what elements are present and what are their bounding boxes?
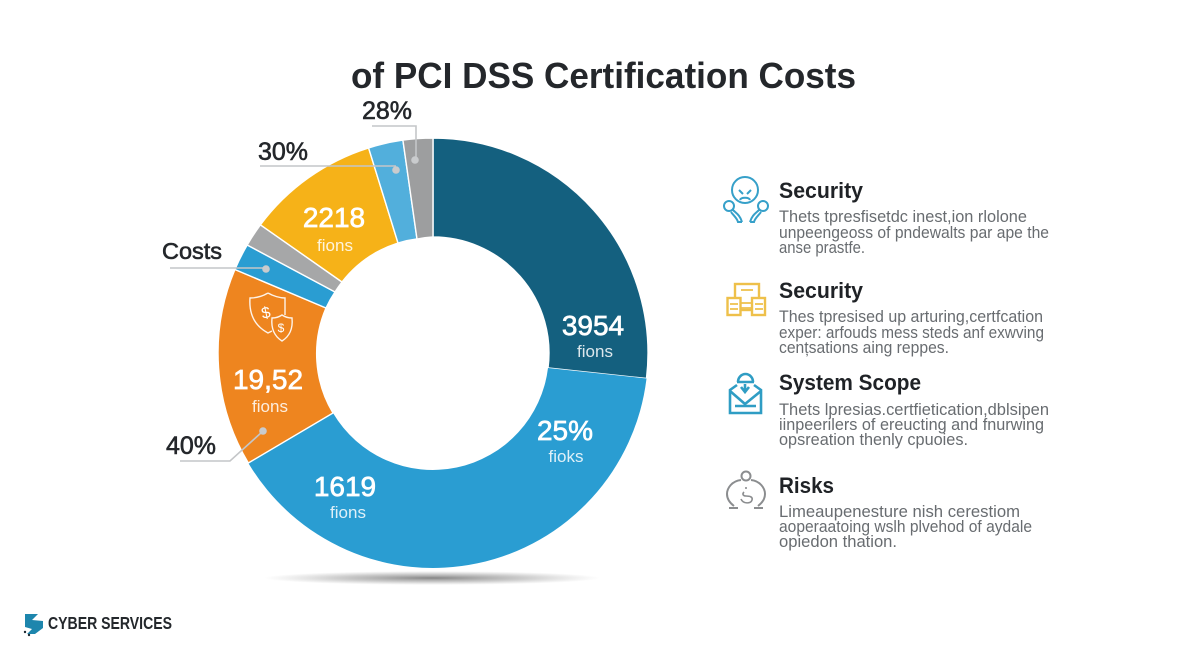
heading: Security	[779, 178, 864, 203]
value: 2218: 2218	[303, 202, 365, 233]
slice: small blue	[235, 245, 335, 308]
value: 3954: fions	[577, 342, 613, 361]
description: Limeaupenesture nish cerestiom	[779, 503, 1020, 521]
icon: gray risk cycle	[727, 472, 765, 508]
title: of PCI DSS Certification Costs	[351, 55, 856, 96]
value: 25%: fioks	[549, 447, 583, 466]
logo text: CYBER SERVICES	[48, 613, 172, 633]
description	[779, 308, 1044, 357]
icon: shields with dollar signs: $	[278, 321, 285, 335]
icon: yellow documents	[728, 284, 765, 315]
slice: orange	[218, 270, 333, 463]
slice: dark blue	[433, 138, 648, 378]
description	[779, 401, 1049, 449]
label: 30%: 30%	[258, 138, 308, 166]
label: 28%: 28%	[362, 97, 412, 125]
description: aoperaatoing wslh plvehod of aydale	[779, 518, 1032, 536]
description	[779, 503, 1032, 551]
value: 1619	[314, 471, 376, 522]
label: 40%: 40%	[166, 432, 216, 460]
icon: blue head and hands	[724, 177, 768, 222]
value: 2218: fions	[317, 236, 353, 255]
description: iinpeerilers of ereucting and fnurwing	[779, 416, 1044, 434]
description: Thes tpresised up arturing,certfcation	[779, 308, 1043, 326]
value: 1619: 1619	[314, 471, 376, 502]
description: Thets lpresias.certfietication,dblsipen	[779, 401, 1049, 419]
description: Thets tpresfisetdc inest,ion rlolone	[779, 208, 1027, 226]
logo: Cyber Services	[24, 613, 172, 636]
icon: blue envelope with lock	[730, 374, 761, 413]
description: cențsations aing reppes.	[779, 339, 949, 357]
item: Security 2	[728, 278, 1044, 357]
value: 25%	[537, 415, 593, 466]
donut chart	[218, 138, 648, 568]
heading: Risks	[779, 473, 834, 498]
label: 40%	[166, 427, 267, 461]
item: System Scope	[730, 370, 1049, 449]
description: opsreation thenly cpuoies.	[779, 431, 968, 449]
value: 19,52: fions	[252, 397, 288, 416]
value: 3954: 3954	[562, 310, 624, 341]
description: anse prastfe.	[779, 239, 865, 257]
label: Costs	[162, 238, 270, 273]
label: 30%	[258, 138, 400, 174]
slice: light blue	[369, 140, 417, 243]
slice: large blue	[248, 368, 647, 568]
icon: shields with dollar signs: $	[260, 304, 272, 323]
label: 28%	[362, 97, 419, 164]
description: opiedon thation.	[779, 533, 897, 551]
description: exper: arfouds mess steds anf exwving	[779, 324, 1044, 342]
heading: System Scope	[779, 370, 921, 395]
logo mark	[24, 614, 43, 636]
heading: Security	[779, 278, 864, 303]
item: Security 1	[724, 177, 1049, 257]
value: 1619: fions	[330, 503, 366, 522]
value: 2218	[303, 202, 365, 255]
value: 25%: 25%	[537, 415, 593, 446]
label: Costs: Costs	[162, 238, 222, 264]
icon: shields with dollar signs	[250, 293, 292, 341]
description	[779, 208, 1049, 257]
donut shadow	[264, 571, 600, 585]
slice: small gray	[247, 225, 342, 292]
value: 19,52: 19,52	[233, 364, 303, 395]
item: Risks	[727, 472, 1032, 551]
slice: top gray	[403, 138, 433, 239]
value: 19,52	[233, 364, 303, 416]
description: unpeengeoss of pndewalts par ape the	[779, 224, 1049, 242]
slice: yellow	[260, 148, 398, 282]
value: 3954	[562, 310, 624, 361]
